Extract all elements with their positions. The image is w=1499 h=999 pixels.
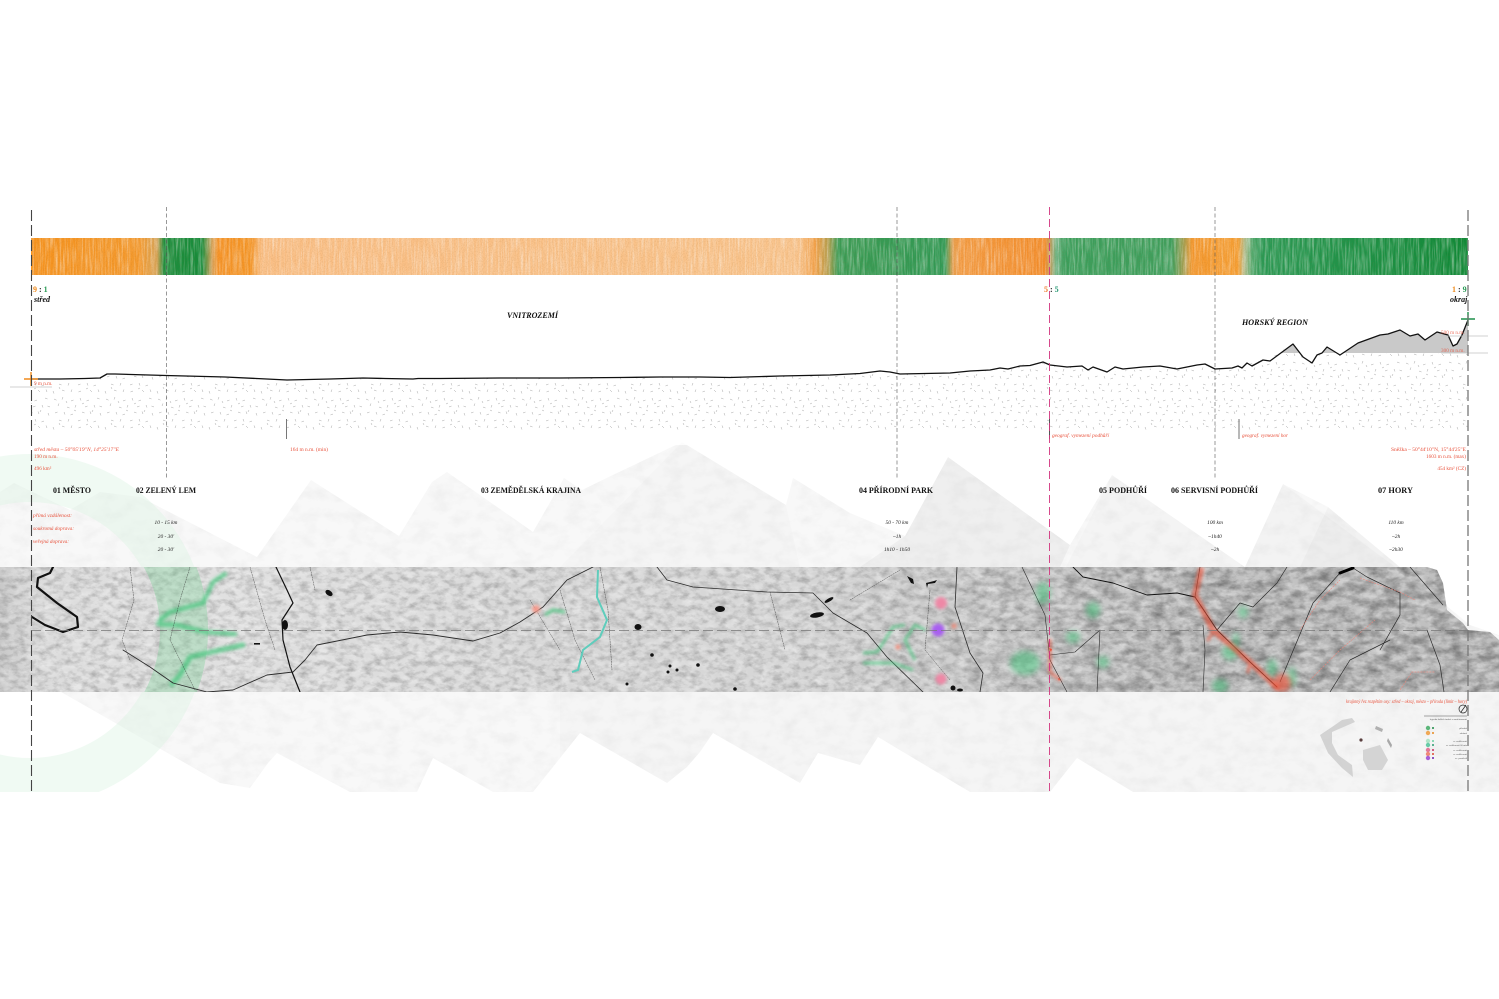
green ring around the city: [0, 478, 182, 782]
pink and purple activity hubs: [532, 597, 956, 684]
inset map of Czechia: [1320, 718, 1392, 777]
zone headings: 05 PODHŮŘÍ: [1099, 485, 1148, 495]
zone headings: 01 MĚSTO: [53, 485, 91, 495]
zone headings: [53, 485, 1414, 495]
red annotations: 496 km²: [34, 466, 52, 472]
legend rule and title: legenda dalších funkcí a zaměstnanosti: [1430, 718, 1467, 721]
colour bar: ratio of built to green land: [31, 238, 1468, 275]
axis end labels: střed: [33, 295, 51, 304]
distance values: 20 - 30': [158, 534, 175, 540]
distance values: 1h10 - 1h50: [884, 547, 910, 553]
distance values: 10 - 15 km: [155, 520, 178, 526]
distance values: 110 km: [1388, 520, 1404, 526]
axis end labels: okraj: [1450, 295, 1468, 304]
map band: [0, 567, 1499, 692]
elevation reference lines: [10, 336, 1488, 387]
mountain relief shading: [836, 567, 1499, 692]
red annotations: [34, 330, 1466, 472]
legend labels: ve vzdálenosti: [1453, 749, 1467, 752]
marker: edge: [1461, 312, 1475, 326]
red annotations: 1603 m n.m. (max): [1426, 453, 1466, 460]
legend labels: urbánní: [1460, 732, 1467, 735]
map caption: krajinný řez rozpětím osy: střed – okraj, město – příroda (limit – hory): [1346, 698, 1467, 705]
distance values: ~1h: [893, 534, 901, 540]
ratio labels: [33, 285, 1467, 294]
legend labels: ve vzdálenosti: [1453, 740, 1467, 743]
distance row labels: veřejná doprava:: [33, 539, 69, 545]
zone headings: 07 HORY: [1378, 485, 1414, 495]
distance values: ~2h30: [1389, 547, 1403, 553]
legend dots: [1426, 726, 1434, 760]
gauge ticks: [286, 419, 1239, 439]
black water bodies: [254, 576, 963, 692]
legend labels: ve vzdálenosti: [1453, 753, 1467, 756]
stippled ground: [31, 320, 1468, 430]
distance values: ~1h40: [1208, 534, 1222, 540]
red annotations: geograf. vymezení podhůří: [1052, 432, 1110, 439]
green corridors: zelený lem: [158, 574, 243, 684]
background: rotated aerial map patches: [0, 442, 1499, 792]
red service corridors: [1050, 570, 1277, 687]
red annotations: Sněžka – 50°44'10"N, 15°44'25"E: [1391, 446, 1466, 453]
legend labels: ve. prostředí: [1455, 757, 1467, 760]
legend labels: přírodní: [1459, 727, 1467, 730]
distance row labels: soukromá doprava:: [33, 526, 74, 532]
distance values: 100 km: [1207, 520, 1223, 526]
zone headings: 02 ZELENÝ LEM: [136, 485, 196, 495]
zone headings: 06 SERVISNÍ PODHŮŘÍ: [1171, 485, 1259, 495]
elevation profile: [10, 312, 1488, 439]
distance values: [155, 520, 1404, 553]
region headings: VNITROZEMÍ: [507, 310, 559, 320]
gray mountain region: [1282, 324, 1468, 353]
ratio labels: 9 : 1: [33, 285, 48, 294]
axis end labels: [33, 295, 1468, 304]
red annotations: střed města – 50°05'19"N, 14°25'17"E: [34, 446, 120, 453]
terrain line: [31, 320, 1468, 380]
red annotations: 500 m n.m.: [1441, 330, 1465, 336]
distance row labels: přímá vzdálenost:: [32, 513, 72, 519]
region headings: HORSKÝ REGION: [1241, 317, 1309, 327]
red annotations: 300 m n.m.: [1441, 348, 1465, 354]
red annotations: 9 m n.m.: [34, 381, 52, 387]
teal river: [572, 570, 607, 672]
ratio labels: 5 : 5: [1044, 285, 1059, 294]
zone headings: 03 ZEMĚDĚLSKÁ KRAJINA: [481, 485, 582, 495]
distance values: 50 - 70 km: [886, 520, 909, 526]
red annotations: geograf. vymezení hor: [1242, 432, 1289, 439]
red annotations: 454 km² (CZ): [1437, 465, 1466, 472]
green corridors: přírodní park and podhůří: [545, 610, 925, 670]
distance values: ~2h: [1392, 534, 1400, 540]
axis lines: [31, 207, 1468, 792]
red annotations: 190 m n.m.: [34, 454, 58, 460]
distance row labels: [32, 513, 74, 545]
legend: [1320, 698, 1468, 777]
zone headings: 04 PŘÍRODNÍ PARK: [859, 485, 933, 495]
green ring inside the band: [144, 567, 208, 692]
region headings: [507, 310, 1309, 327]
distance values: 20 - 30': [158, 547, 175, 553]
legend rule and title: [1424, 716, 1467, 721]
legend labels: [1446, 727, 1468, 760]
legend labels: ve vzdálenosti 60 min: [1446, 744, 1468, 747]
linework: roads and rivers: [32, 567, 1444, 692]
icon: north arrow: [1459, 705, 1467, 713]
ratio labels: 1 : 9: [1452, 285, 1467, 294]
marker: centre: [24, 372, 38, 386]
distance values: ~2h: [1211, 547, 1219, 553]
red annotations: 164 m n.m. (min): [290, 446, 328, 453]
